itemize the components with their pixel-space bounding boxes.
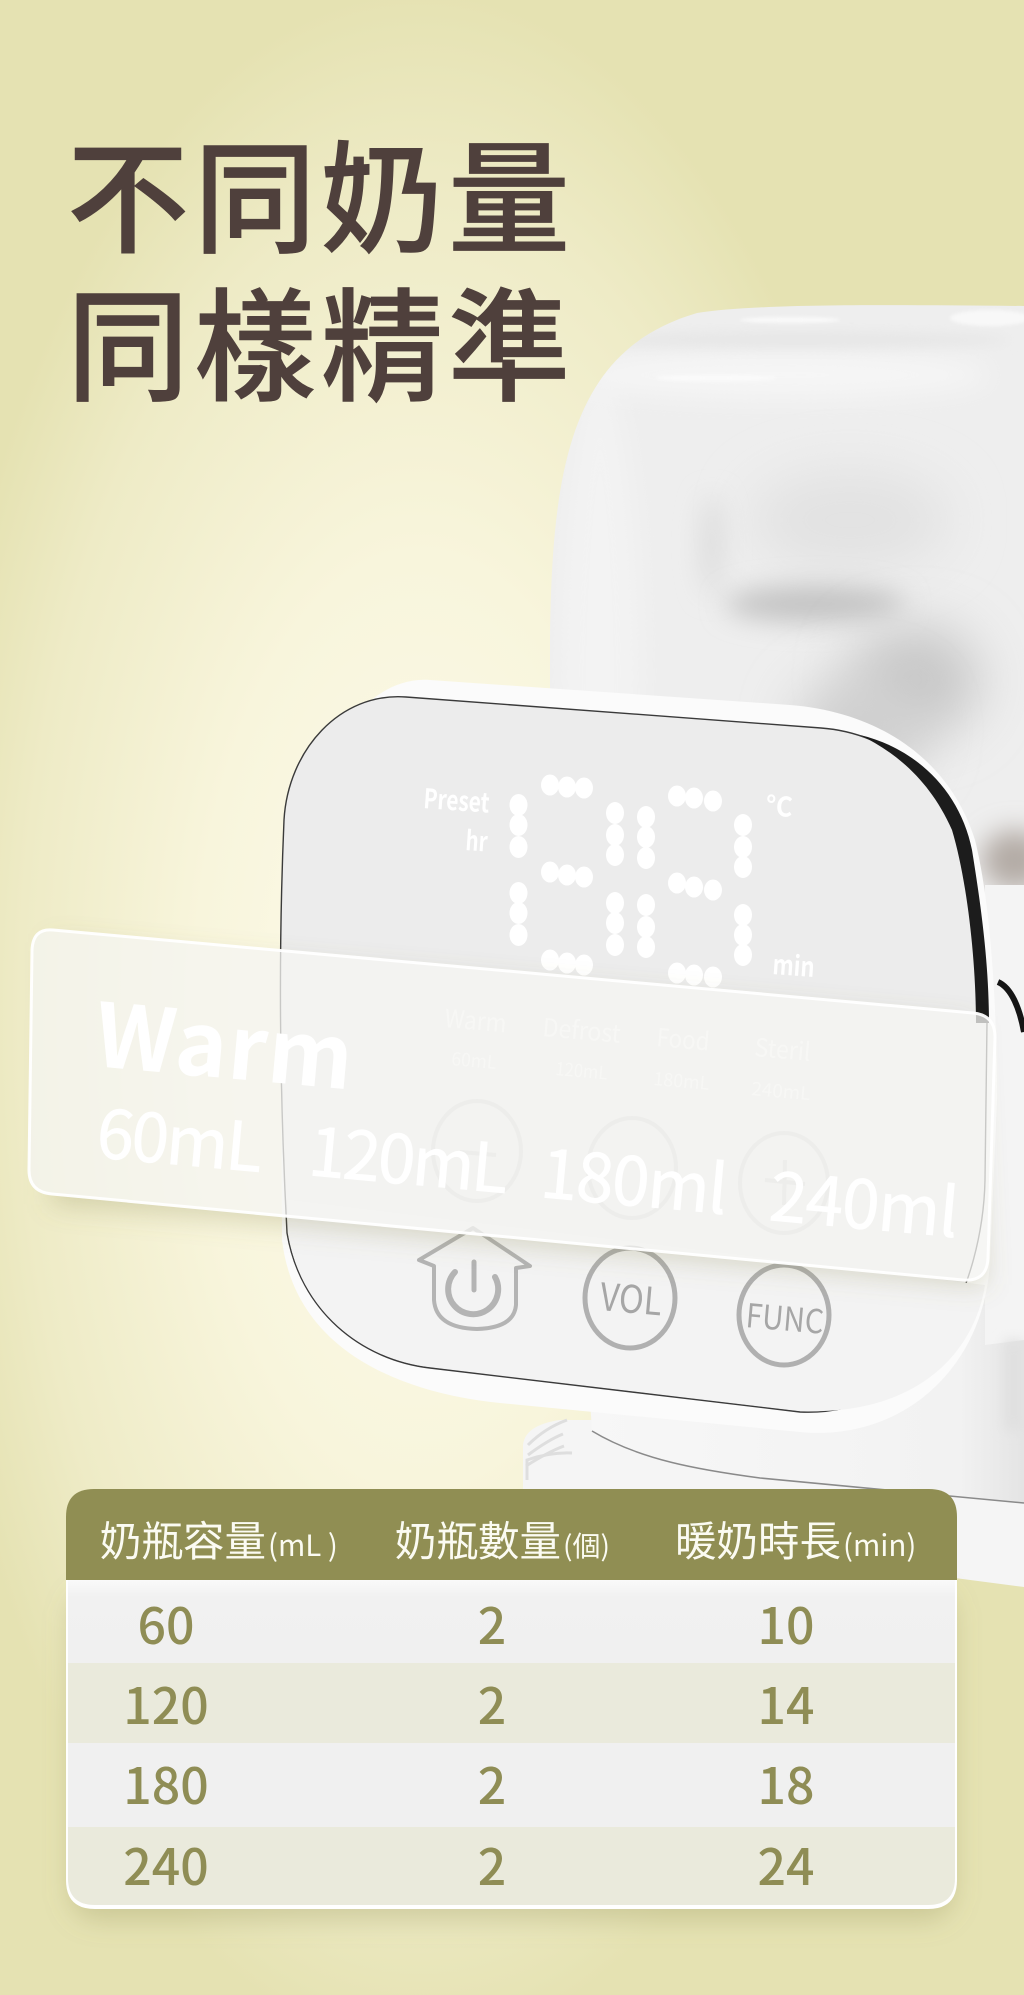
button: FUNC: FUNC [744,1289,826,1344]
row 120: 2 [478,1667,506,1739]
row 240 [68,1827,955,1905]
mode labels beneath card: 120mL [554,1055,609,1086]
card volume: 120mL: 120mL [305,1098,513,1213]
button: VOL: VOL [598,1266,665,1326]
device base [523,1420,1024,1587]
header: warm time: 暖奶時長(min) [675,1508,916,1568]
header: bottle count: 奶瓶數量(個) [395,1508,610,1568]
row 240: 24 [758,1828,814,1900]
row 180: 180 [123,1747,209,1819]
row 180: 18 [758,1747,814,1819]
control panel face [280,697,987,1412]
row 60: 60 [138,1587,194,1659]
card heading: Warm: Warm [91,965,359,1115]
icon: power button house [419,1228,530,1329]
row 240: 240 [123,1828,209,1900]
card volume: 180ml: 180ml [537,1120,732,1234]
display labels: hr [464,819,489,860]
row 240: 2 [478,1828,506,1900]
row 60: 2 [478,1587,506,1659]
row 120: 120 [123,1667,209,1739]
row 60 [68,1580,955,1663]
row 180 [68,1743,955,1827]
title: 不同奶量 [67,102,575,279]
row 120 [68,1663,955,1743]
lower body edge line [592,1431,1024,1503]
display labels: min [771,943,816,985]
glass card [29,930,995,1285]
table header [66,1489,957,1580]
card volume: 60mL: 60mL [93,1080,267,1192]
row 60: 10 [758,1587,814,1659]
mode labels beneath card: Food [655,1018,711,1059]
display labels: °C [764,784,794,825]
mode labels beneath card [443,999,812,1106]
mode labels beneath card: 60mL [450,1045,498,1075]
data table [66,1489,957,1920]
table shadow [70,1590,954,1920]
black arc accent [998,982,1024,1032]
LED digit two [637,786,752,988]
faded upper buttons [433,1101,828,1233]
title: 同樣精準 [67,250,575,427]
row 180: 2 [478,1747,506,1819]
lower face lighter fill [288,1200,985,1411]
title [67,102,575,427]
table plate [66,1580,957,1909]
mode labels beneath card: Warm [443,999,508,1040]
product: warmer device photo [280,295,1024,1587]
button: FUNC [739,1265,829,1365]
display labels: Preset [422,777,491,821]
chrome black edge [860,735,989,1023]
control panel outer shell [280,680,997,1433]
card plate [29,930,995,1280]
mode labels beneath card: Steril [753,1028,812,1069]
lower body [590,1290,1024,1503]
top milk container [550,305,1024,893]
mode labels beneath card: 180mL [652,1065,711,1096]
header: bottle capacity: 奶瓶容量(mL ) [100,1508,338,1568]
LED digit one [510,774,624,976]
card volume: 240ml: 240ml [766,1143,963,1257]
row 120: 14 [758,1667,814,1739]
right lower shadow [1004,1340,1024,1430]
display labels [422,777,816,985]
base fin stripes [526,1420,572,1480]
mode labels beneath card: Defrost [541,1008,623,1051]
mode labels beneath card: 240mL [750,1075,812,1106]
card shadow [44,1178,996,1295]
button: VOL [585,1248,675,1348]
right side column [985,885,1024,1345]
